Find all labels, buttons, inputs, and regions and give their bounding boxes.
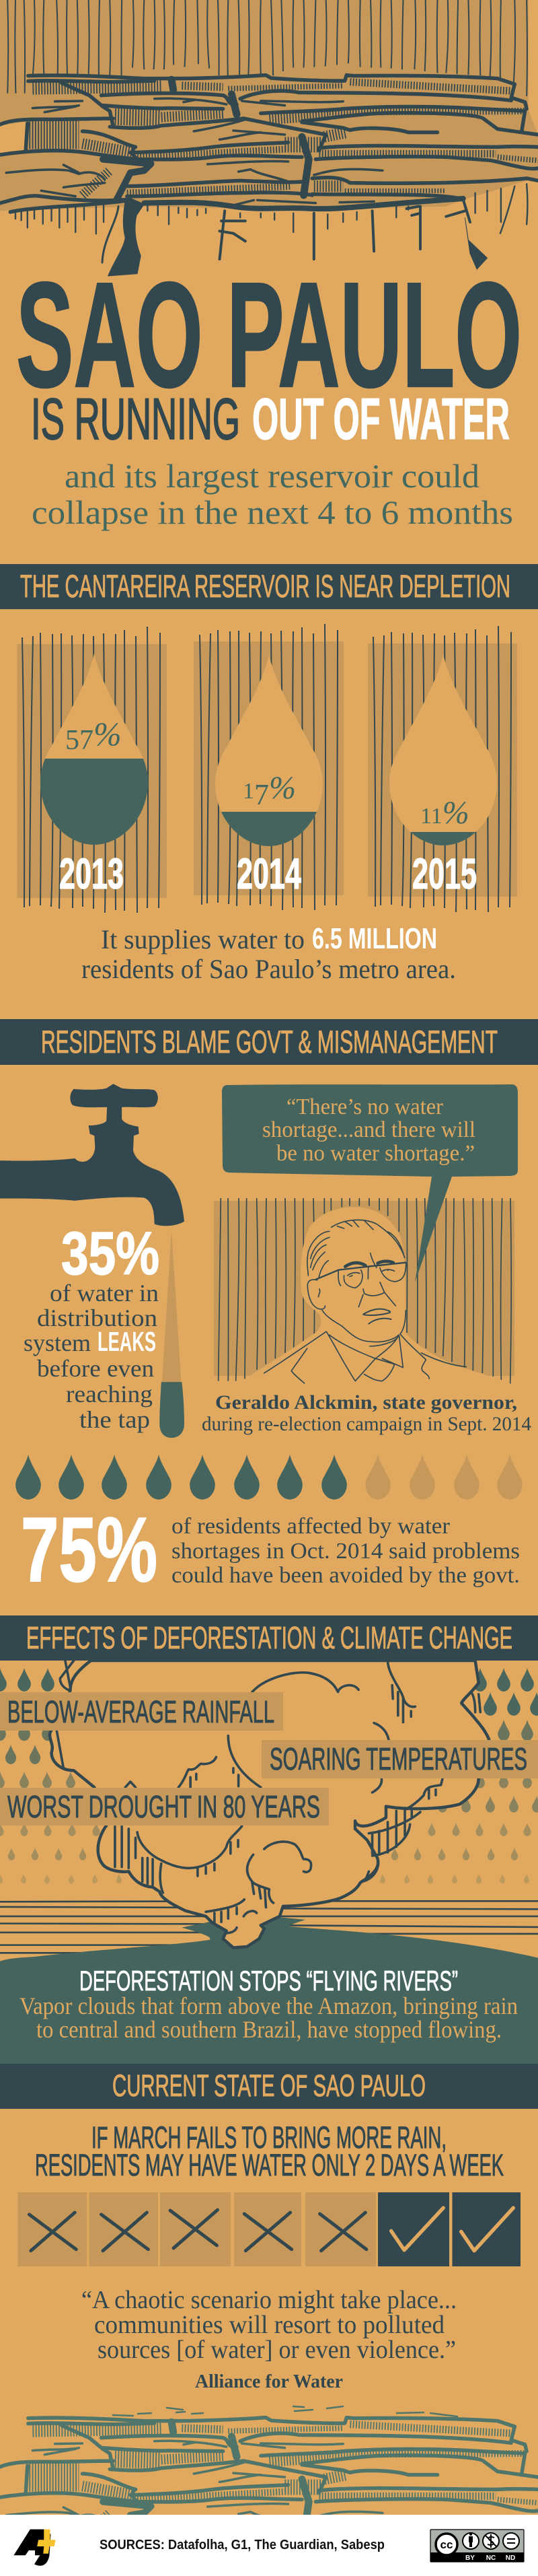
text: March warning [35,2120,504,2182]
rain drops field [0,1668,538,1883]
stat: 35% leaks: system [24,1329,91,1356]
cloud body [50,1661,489,1948]
panel: flying rivers ground [0,1918,538,2064]
footer [0,2515,538,2576]
year 2015: 2015 [412,849,477,898]
value 11%: 11% [420,795,469,831]
icon: leaking drip [159,1231,184,1438]
value 17%: 7 [254,778,269,811]
deck: reservoir could collapse: and its largest reservoir could [65,457,479,495]
caption: governor: Geraldo Alckmin, state governor, [215,1391,517,1414]
dark words: IS RUNNING [31,387,240,452]
quote text: be no water shortage.” [276,1141,475,1166]
quote: chaotic scenario [81,2286,457,2392]
stat: 35% leaks: the tap [79,1406,150,1433]
icon: drop 17% [215,655,323,846]
caption: governor [202,1391,531,1435]
quote: chaotic scenario: sources [of water] or even violence.” [98,2336,456,2364]
stat: 35% leaks: distribution [37,1304,157,1331]
text: supplies 6.5 million: It supplies water to [101,924,305,954]
stat: 75%: 75% [21,1498,157,1601]
badge: creative commons licence: BY [465,2554,475,2562]
stat: 35% leaks: of water in [50,1280,159,1307]
illustration: bottom cracked earth [0,2406,538,2554]
year 2013: 2013 [59,849,124,898]
deck: reservoir could collapse [32,457,513,531]
value 57%: % [93,715,122,753]
section header: current state [0,2064,538,2109]
text: 75% explanation: of residents affected by water [171,1514,451,1539]
parched ground panel [0,0,538,211]
badge: creative commons licence: NC [486,2554,496,2562]
icon: drop 57% [40,654,148,845]
panel: reservoir 2015 [368,626,517,912]
deep fissures [108,197,487,276]
panel: reservoir 2014 [194,624,344,910]
stat: 35% leaks: before even [37,1355,154,1382]
ground lines [0,1901,538,1953]
pictogram: 75% drops [15,1455,523,1500]
illustration: cracked earth [0,0,538,276]
stat: 35% leaks: 35% [61,1220,159,1288]
badge: creative commons licence: cc [440,2538,453,2551]
vertical rain strokes [7,0,527,96]
text: supplies 6.5 million: residents of Sao Paulo’s metro area. [81,954,456,984]
quote text: shortage...and there will [262,1117,475,1142]
value 17%: 1 [243,779,254,804]
logo: AJ+ [13,2530,56,2566]
icons: water days [391,2208,513,2251]
chart: days of the week [17,2192,521,2266]
cracked slabs [0,75,538,212]
badge: creative commons licence [430,2530,524,2562]
label: drought [0,1788,329,1825]
attribution: Alliance for Water [195,2371,343,2392]
sources: SOURCES: Datafolha, G1, The Guardian, Sabesp [100,2538,385,2552]
quote text: “There’s no water [286,1094,444,1119]
value 57%: 57 [65,725,93,756]
text: supplies 6.5 million [81,922,456,984]
text: supplies 6.5 million: 6.5 MILLION [312,922,437,955]
text: flying rivers: to central and southern Brazil, have stopped flowing. [36,2016,502,2043]
cloud inner lines [56,1661,480,1933]
icon: faucet [0,1084,184,1226]
label: rainfall: BELOW-AVERAGE RAINFALL [7,1694,274,1729]
figure silhouette [249,1207,518,1387]
value 17%: % [269,770,296,806]
quote: chaotic scenario: “A chaotic scenario might take place... [81,2286,457,2314]
quote: chaotic scenario: communities will resort to polluted [94,2311,445,2339]
icons: no-water days [29,2210,367,2251]
badge: creative commons licence: ND [506,2554,515,2562]
stat: 35% leaks: reaching [66,1381,153,1407]
panel: reservoir 2013 [17,627,167,913]
text: flying rivers [20,1965,518,2043]
illustration: dust cloud [50,1661,489,1948]
icon: drop 11% [389,654,497,845]
quote text [262,1094,475,1166]
stat: 35% leaks [24,1220,159,1433]
caption: governor: during re-election campaign in Sept. 2014 [202,1413,531,1435]
hanging cracks and drips [15,184,527,263]
figure line work [264,1220,466,1383]
text: 75% explanation [171,1514,520,1588]
panel: governor portrait [214,1198,518,1387]
text: 75% explanation: shortages in Oct. 2014 said problems [171,1539,520,1564]
subtitle line [31,387,510,452]
callout: speech bubble [222,1084,518,1282]
deck: reservoir could collapse: collapse in the next 4 to 6 months [32,493,513,531]
label: rainfall [0,1692,283,1731]
year 2014: 2014 [237,849,301,898]
text: 75% explanation: could have been avoided by the govt. [171,1563,520,1588]
label: drought: WORST DROUGHT IN 80 YEARS [7,1789,320,1824]
stat: 35% leaks: LEAKS [98,1326,156,1357]
